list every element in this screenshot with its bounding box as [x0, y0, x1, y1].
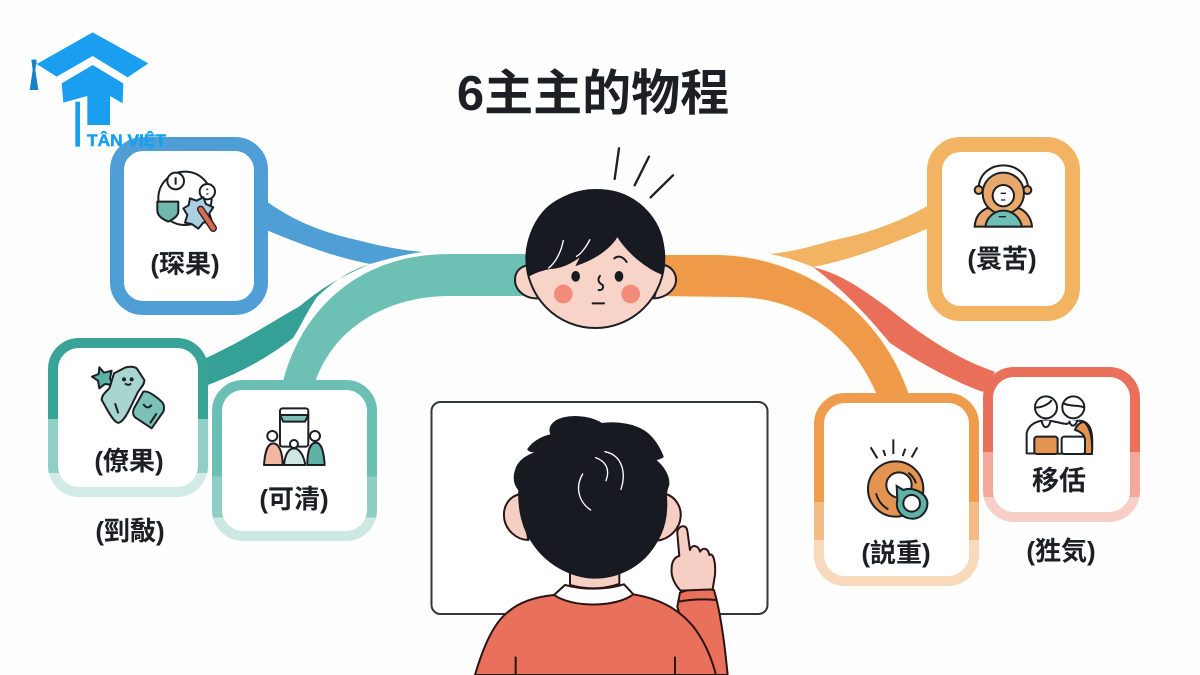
- raised arm: [677, 589, 728, 675]
- collar: [554, 584, 633, 605]
- character: person seen from behind: [475, 417, 728, 675]
- nose, mouth, brow: [593, 257, 627, 303]
- left ear: [504, 494, 528, 540]
- icon: gear and coins: [157, 172, 215, 229]
- label: (琛果): [150, 249, 220, 279]
- face: [526, 190, 664, 328]
- panel: red card: [988, 372, 1135, 517]
- icon: ring with speech bubble: [868, 439, 927, 519]
- connector: blue branch: [266, 201, 423, 264]
- icon: person with headset: [975, 165, 1032, 227]
- panel: orange card: [819, 398, 974, 581]
- cuff and back lines: [516, 599, 716, 675]
- hair highlights: [548, 239, 590, 268]
- connector: red branch: [813, 267, 995, 392]
- right ear: [657, 494, 681, 541]
- icon: smiling shapes: [92, 367, 164, 428]
- hair: [527, 190, 664, 276]
- neck: [570, 570, 619, 588]
- logo: Tân Việt: [30, 32, 166, 150]
- label: (睘苦): [967, 244, 1037, 274]
- panel: dark teal card: [53, 343, 203, 492]
- panel: blue card: [117, 144, 261, 308]
- title: 6主主的物程: [457, 67, 729, 121]
- label: 移佸: [1032, 466, 1086, 496]
- label: (可清): [259, 484, 329, 514]
- character: head with surprise marks: [515, 148, 676, 328]
- panel: light teal card: [217, 385, 372, 536]
- icon: group around a screen: [264, 408, 325, 465]
- icon: two people: [1027, 396, 1092, 454]
- eyes: [571, 271, 580, 282]
- body: [475, 594, 716, 675]
- label: (僚果): [94, 446, 164, 476]
- hair: [515, 417, 668, 578]
- ears: [515, 265, 676, 298]
- connector: light orange branch: [770, 205, 929, 267]
- logo: Tân Việt: TÂN VIỆT: [87, 131, 166, 150]
- connector: orange main band: [660, 255, 909, 395]
- connector: teal main band: [283, 254, 530, 382]
- surprise marks: [615, 148, 673, 197]
- label: below red card: (狌気): [1026, 536, 1096, 566]
- hair highlights: [579, 452, 623, 510]
- connector: dark teal branch: [205, 264, 370, 386]
- label: (説重): [861, 538, 931, 568]
- panel: light orange card: [934, 144, 1072, 314]
- screen frame: [432, 402, 768, 614]
- label: below teal card: (剄敽): [95, 516, 165, 546]
- cheeks: [554, 285, 573, 303]
- pointing hand: [671, 526, 715, 591]
